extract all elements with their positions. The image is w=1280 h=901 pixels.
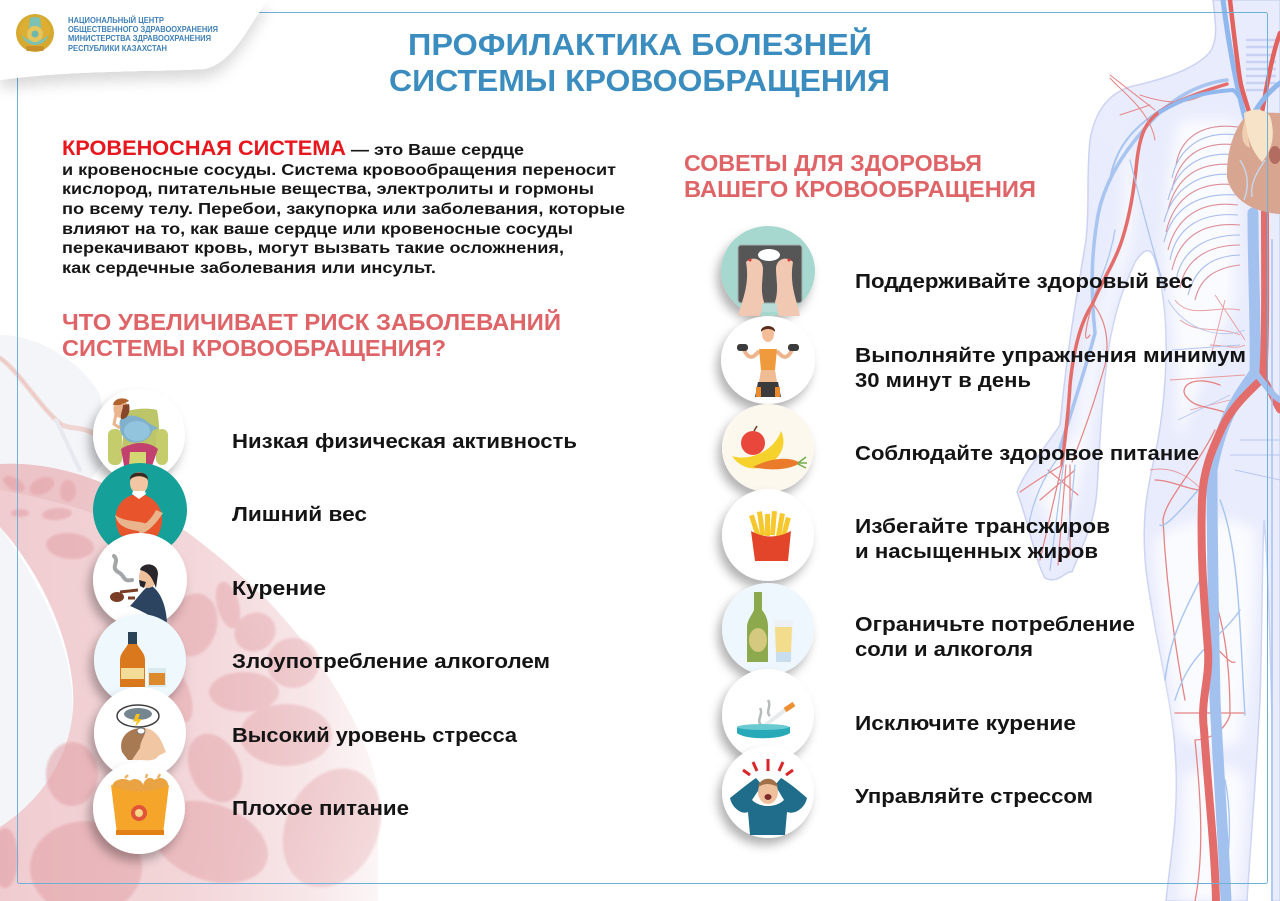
icon: ashtray and cigarette (722, 669, 814, 761)
icon: man in armchair (93, 389, 185, 481)
icon: bottle and glass (94, 614, 186, 706)
list: health tips: Избегайте трансжиров (855, 515, 1110, 538)
organisation name (68, 16, 218, 53)
list: health tips: Поддерживайте здоровый вес (855, 270, 1193, 293)
list: health tips: соли и алкоголя (855, 638, 1033, 661)
heading: risks: СИСТЕМЫ КРОВООБРАЩЕНИЯ? (62, 335, 446, 361)
list: health tips: Выполняйте упражнения минимум (855, 344, 1246, 367)
organisation name: ОБЩЕСТВЕННОГО ЗДРАВООХРАНЕНИЯ (68, 25, 218, 34)
title: ПРОФИЛАКТИКА БОЛЕЗНЕЙ (408, 26, 872, 62)
icon: fruit and vegetables (722, 404, 814, 492)
background: pale vessel branch (0, 358, 100, 470)
organisation name: МИНИСТЕРСТВА ЗДРАВООХРАНЕНИЯ (68, 34, 211, 43)
list: risk factors: Лишний вес (232, 503, 367, 526)
intro text block: и кровеносные сосуды. Система кровообращения переносит (62, 162, 616, 179)
list: health tips: Исключите курение (855, 712, 1076, 735)
intro text block: — это Ваше сердце (351, 142, 524, 159)
icon: stress thought cloud (94, 687, 186, 779)
heading: tips: СОВЕТЫ ДЛЯ ЗДОРОВЬЯ (684, 150, 982, 176)
organisation name: НАЦИОНАЛЬНЫЙ ЦЕНТР (68, 16, 165, 25)
icon: fried chicken bucket (93, 762, 185, 854)
intro text block: влияют на то, как ваше сердце или кровеносные сосуды (62, 221, 573, 238)
list: health tips: Соблюдайте здоровое питание (855, 442, 1199, 465)
organisation name: РЕСПУБЛИКИ КАЗАХСТАН (68, 44, 167, 53)
icon: stressed man (722, 746, 814, 838)
list: health tips: 30 минут в день (855, 369, 1031, 392)
human body illustration with circulatory system (1017, 0, 1280, 901)
background: pale body silhouette (0, 335, 110, 827)
intro text block: перекачивают кровь, могут вызвать такие осложнения, (62, 240, 564, 257)
intro text block: по всему телу. Перебои, закупорка или заболевания, которые (62, 201, 625, 218)
icon: feet on scales (721, 226, 815, 316)
intro text block (62, 137, 625, 277)
icon: overweight man (93, 463, 187, 557)
header logo panel (0, 0, 268, 80)
list: risk factors: Высокий уровень стресса (232, 724, 518, 747)
icon: bottle and beer glass (722, 583, 814, 675)
list: risk factors (232, 430, 577, 820)
icon: man smoking a pipe (93, 533, 187, 627)
body highlights (1036, 120, 1256, 901)
title (389, 26, 890, 98)
intro text block: кислород, питательные вещества, электролиты и гормоны (62, 181, 594, 198)
heading: tips (684, 150, 1036, 202)
icon: woman with dumbbells (721, 316, 815, 404)
arm and pelvis vessels (1020, 0, 1280, 901)
list: health tips: Ограничьте потребление (855, 613, 1135, 636)
list: risk factors: Низкая физическая активность (232, 430, 577, 453)
list: risk factors: Курение (232, 577, 326, 600)
list: health tips: Управляйте стрессом (855, 785, 1093, 808)
list: health tips (855, 270, 1246, 808)
intro text block: КРОВЕНОСНАЯ СИСТЕМА (62, 137, 346, 160)
icon: french fries (722, 489, 814, 581)
heading: risks: ЧТО УВЕЛИЧИВАЕТ РИСК ЗАБОЛЕВАНИЙ (62, 308, 561, 335)
title: СИСТЕМЫ КРОВООБРАЩЕНИЯ (389, 63, 890, 98)
background: blood vessel with red cells (0, 464, 400, 901)
list: risk factors: Злоупотребление алкоголем (232, 650, 550, 673)
intro text block: как сердечные заболевания или инсульт. (62, 260, 436, 277)
icon: national emblem (16, 14, 54, 52)
list: risk factors: Плохое питание (232, 797, 409, 820)
heading: risks (62, 308, 561, 361)
heading: tips: ВАШЕГО КРОВООБРАЩЕНИЯ (684, 176, 1036, 202)
heart (1227, 110, 1280, 214)
ribs (1150, 40, 1280, 495)
list: health tips: и насыщенных жиров (855, 540, 1098, 563)
